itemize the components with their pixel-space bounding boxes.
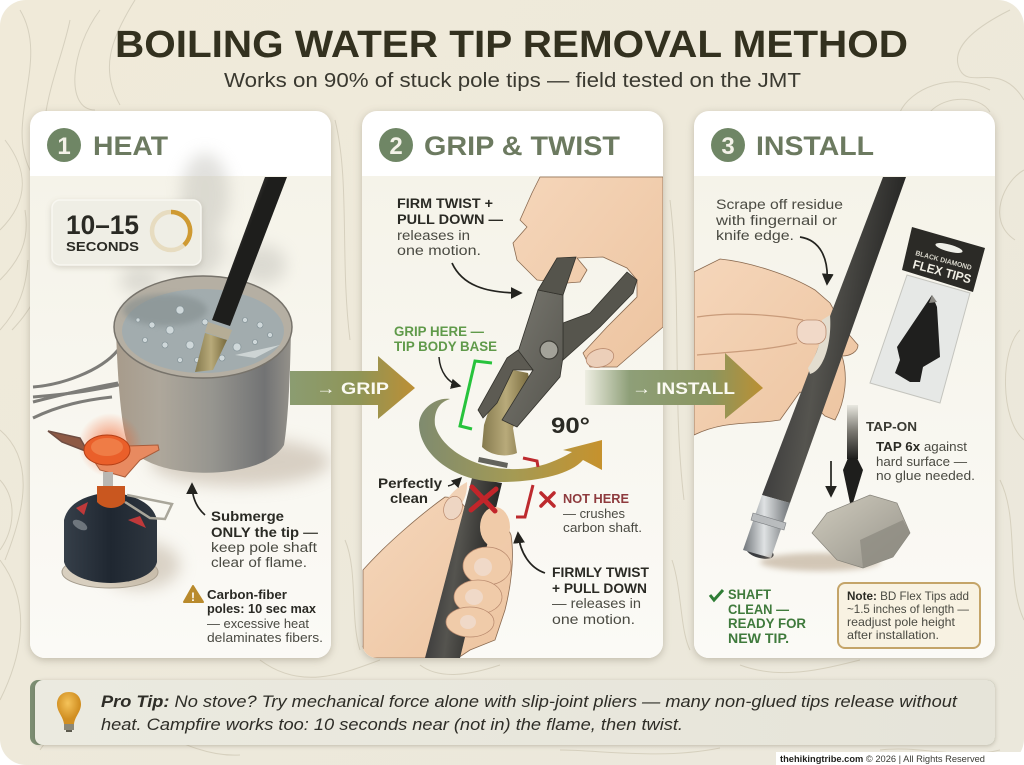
text: tap-on: TAP-ON — [866, 420, 917, 434]
illustration: shaft stub ring — [478, 457, 508, 468]
illustration: nail on upper hand — [586, 348, 614, 368]
arrow: 90 degree twist — [419, 399, 602, 482]
title: BOILING WATER TIP REMOVAL METHOD — [115, 24, 908, 66]
text: tap instructions — [876, 439, 975, 483]
text: firm twist top: one motion. — [397, 243, 481, 258]
text: grip here: GRIP HERE — — [394, 324, 484, 339]
text: firmly twist lower: one motion. — [552, 612, 635, 627]
step 2 number: 2 — [389, 133, 403, 160]
arrow: scrape pointer — [800, 237, 827, 284]
text: firmly twist lower: FIRMLY TWIST — [552, 565, 650, 580]
arrow: tap down — [830, 461, 832, 496]
arrow: to install — [585, 353, 763, 419]
text: pro tip: Pro Tip: No stove? Try mechanical force alone with slip-joint pliers — many non-glued tips release without — [101, 692, 958, 711]
arrow: grip here pointer — [439, 357, 460, 386]
illustration: tap-on tip — [843, 405, 863, 503]
text: perfectly clean — [379, 478, 442, 503]
step 3 number: 3 — [721, 133, 735, 160]
arrow: to grip — [290, 356, 415, 419]
illustration: hand scraping — [694, 259, 858, 435]
icon: green check — [710, 590, 723, 600]
callout: note: after installation. — [847, 628, 939, 642]
arrow: to grip: → GRIP — [316, 379, 389, 398]
timer callout: SECONDS — [66, 239, 139, 254]
step 2 number badge — [379, 128, 413, 162]
icon: timer ring — [152, 212, 190, 250]
icon: steam — [120, 153, 286, 295]
text: shaft clean: NEW TIP. — [728, 631, 789, 646]
text: firm twist top: PULL DOWN — — [397, 212, 504, 227]
step 3 heading: INSTALL — [756, 131, 874, 161]
text: submerge note: Submerge — [211, 509, 285, 524]
text: firm twist top: FIRM TWIST + — [397, 196, 493, 211]
step 2 heading: GRIP & TWIST — [424, 131, 621, 161]
text: not here: carbon shaft. — [563, 520, 642, 535]
panel: step 2 grip and twist — [362, 111, 663, 658]
step 1 heading: HEAT — [93, 131, 169, 161]
label: 90 degrees: 90° — [551, 413, 590, 438]
illustration: pot — [114, 276, 292, 473]
marker: not here brackets — [516, 458, 538, 517]
illustration: rock — [812, 495, 910, 568]
text: firmly twist lower — [552, 565, 650, 627]
text: shaft clean — [728, 587, 806, 646]
arrow: clean pointer — [448, 478, 461, 486]
illustration: camp stove and canister — [48, 413, 180, 589]
illustration: pliers — [478, 257, 637, 427]
text: shaft clean: READY FOR — [728, 616, 806, 631]
arrow: submerge pointer — [192, 484, 205, 515]
text: submerge note: ONLY the tip — — [211, 525, 319, 540]
text: pro tip — [101, 692, 958, 734]
illustration: flex tips package: FLEX TIPS — [911, 257, 973, 286]
icon: warning triangle: ! — [191, 590, 195, 604]
illustration: silver ferrule — [743, 495, 790, 561]
illustration: flex tips package: BLACK DIAMOND — [914, 250, 972, 272]
text: tap instructions: hard surface — — [876, 454, 967, 469]
icon: red X not here — [541, 493, 554, 506]
illustration: lower hand and shaft — [363, 478, 512, 658]
text: shaft clean: CLEAN — — [728, 602, 789, 617]
panel: pro tip — [30, 680, 995, 745]
text: scrape off: with fingernail or — [715, 213, 838, 228]
text: not here — [563, 494, 641, 532]
text: submerge note: keep pole shaft — [211, 540, 317, 555]
timer callout — [52, 200, 201, 265]
subtitle: Works on 90% of stuck pole tips — field tested on the JMT — [224, 70, 801, 92]
text: carbon fiber warning: poles: 10 sec max — [207, 602, 316, 616]
text: tap instructions: TAP 6x against — [876, 439, 967, 454]
illustration: stove handle wires — [32, 349, 119, 420]
text: carbon fiber warning: delaminates fibers. — [207, 631, 323, 645]
illustration: pot shadow — [150, 438, 330, 486]
text: carbon fiber warning: — excessive heat — [207, 617, 310, 631]
text: carbon fiber warning — [207, 588, 323, 645]
text: firmly twist lower: — releases in — [552, 596, 641, 611]
callout: note: ~1.5 inches of length — — [847, 602, 969, 616]
panel: step 1 heat — [30, 111, 331, 658]
text: perfectly clean: clean — [390, 490, 428, 506]
text: perfectly clean: Perfectly — [378, 475, 442, 491]
icon: light bulb — [57, 692, 81, 732]
icon: warning triangle — [184, 586, 203, 604]
arrow: firm twist pointer — [452, 263, 521, 293]
text: not here: NOT HERE — [563, 491, 629, 506]
text: scrape off: Scrape off residue — [716, 197, 843, 212]
step 3 number badge — [711, 128, 745, 162]
illustration: flex tips package — [870, 227, 985, 403]
timer callout: 10–15 — [66, 210, 139, 240]
text: carbon fiber warning: Carbon-fiber — [207, 588, 287, 602]
illustration: residue — [808, 315, 830, 374]
text: scrape off — [715, 197, 843, 243]
step 1 number: 1 — [57, 133, 71, 160]
illustration: ground shadow — [760, 553, 880, 571]
text: submerge note — [211, 509, 319, 570]
illustration: upper hand — [513, 177, 663, 367]
text: shaft clean: SHAFT — [728, 587, 772, 602]
callout: note — [838, 583, 980, 648]
text: firm twist top: releases in — [397, 228, 470, 243]
icon: red X on shaft — [471, 487, 496, 511]
step 1 number badge — [47, 128, 81, 162]
marker: grip bracket — [460, 361, 492, 429]
illustration: trekking pole in pot — [195, 177, 287, 372]
text: firmly twist lower: + PULL DOWN — [552, 581, 647, 596]
callout: note: readjust pole height — [847, 615, 956, 629]
illustration: nail — [797, 320, 826, 344]
text: not here: — crushes — [563, 506, 625, 521]
footer credit: thehikingtribe.com © 2026 | All Rights Reserved — [780, 754, 985, 765]
arrow: to install: → INSTALL — [632, 379, 735, 398]
text: scrape off: knife edge. — [716, 228, 794, 243]
illustration: pole — [762, 177, 906, 503]
text: grip here — [394, 326, 496, 351]
text: submerge note: clear of flame. — [211, 555, 307, 570]
panel: step 3 install — [694, 111, 995, 658]
text: tap instructions: no glue needed. — [876, 468, 975, 483]
text: firm twist top — [397, 196, 504, 258]
arrow: firmly twist pointer — [518, 533, 545, 573]
text: grip here: TIP BODY BASE — [394, 339, 497, 354]
callout: note: Note: BD Flex Tips add — [847, 589, 969, 603]
text: pro tip: heat. Campfire works too: 10 seconds near (not in) the flame, then twist. — [101, 715, 683, 734]
illustration: brass tip — [482, 370, 530, 455]
